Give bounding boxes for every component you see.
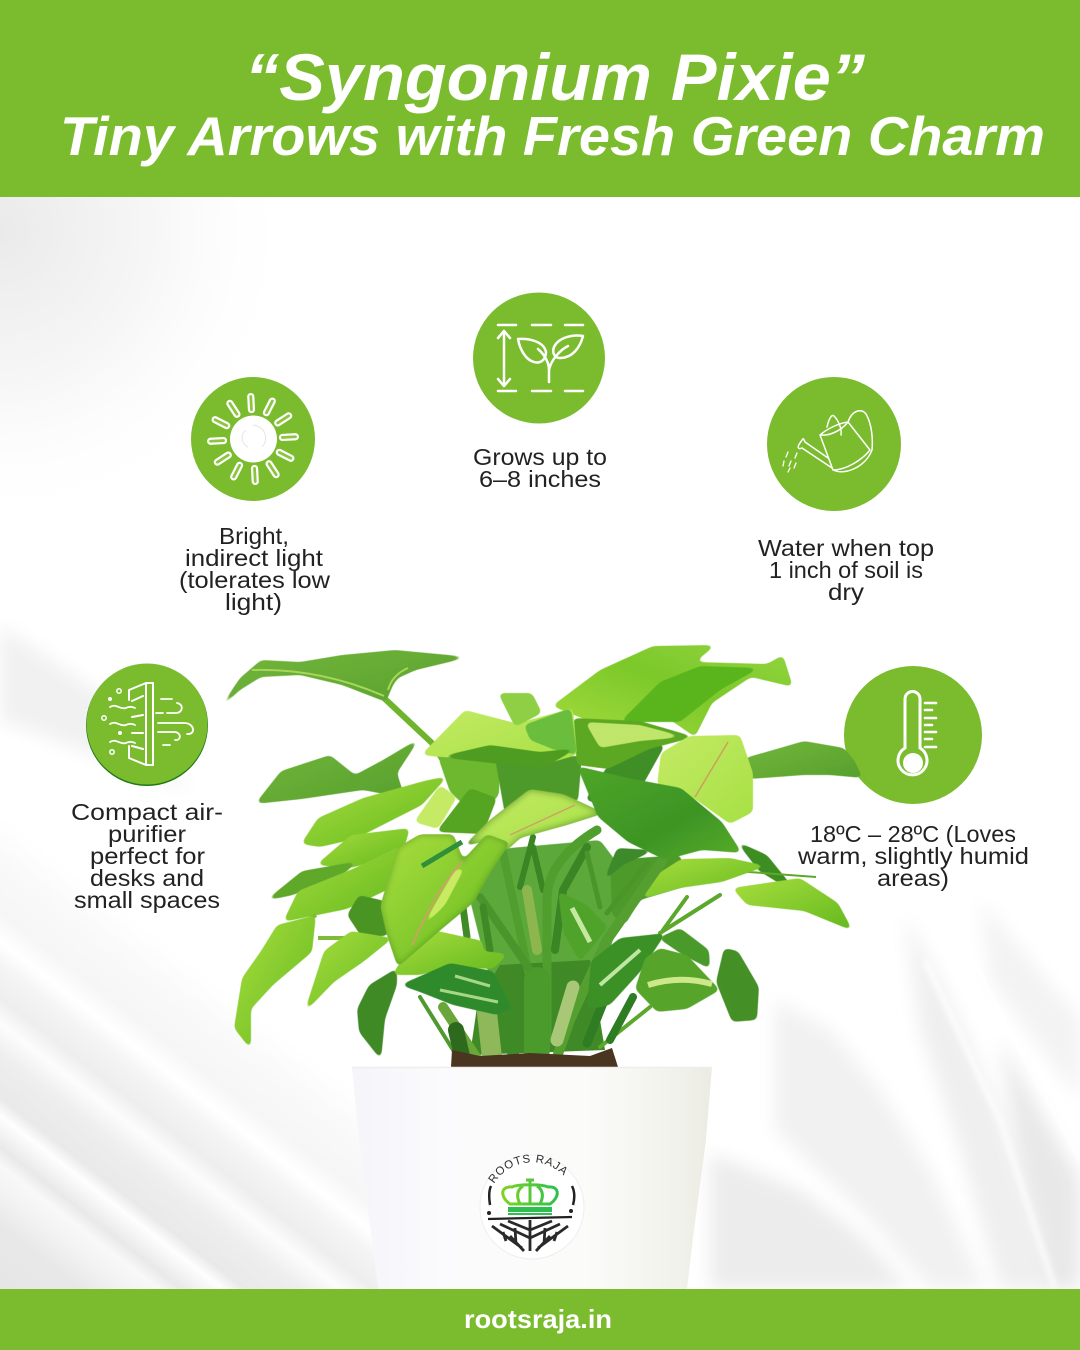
- leaves: left cluster: [414, 785, 457, 829]
- label: air purifier: desks and: [90, 865, 204, 891]
- label: temperature: [797, 821, 1029, 891]
- label: light: Bright,: [219, 523, 289, 549]
- title: “Syngonium Pixie”: [245, 40, 865, 114]
- label: air purifier: [71, 799, 223, 913]
- leaf: far right: [745, 741, 863, 779]
- plant: syngonium foliage: [216, 645, 863, 1067]
- icon: plant height: [473, 292, 605, 424]
- label: air purifier: small spaces: [74, 887, 220, 913]
- feature: light: [179, 377, 330, 615]
- leaf: variegated centre: [421, 708, 578, 767]
- label: air purifier: purifier: [108, 821, 186, 847]
- leaf: left middle: [255, 738, 420, 804]
- label: light: [179, 523, 330, 615]
- leaf: top left: [216, 650, 470, 713]
- label: temperature: areas): [877, 865, 949, 891]
- label: water: dry: [828, 579, 865, 605]
- label: light: indirect light: [185, 545, 324, 571]
- leaf: lower right spread: [732, 878, 853, 931]
- logo: Roots Raja badge: [480, 1154, 584, 1260]
- leaf: pale centre front: [466, 790, 602, 849]
- leaf: upper cluster dark: [573, 718, 695, 769]
- feature: height: [473, 292, 607, 492]
- label: water: 1 inch of soil is: [769, 557, 923, 583]
- website address: rootsraja.in: [464, 1304, 612, 1334]
- leaves: lower front: [558, 891, 608, 962]
- logo: Roots Raja badge: ROOTS RAJA: [488, 1154, 566, 1184]
- icon: sun: [191, 377, 315, 501]
- label: water: Water when top: [758, 535, 934, 561]
- feature: temperature: [797, 666, 1029, 891]
- subtitle: Tiny Arrows with Fresh Green Charm: [60, 105, 1045, 167]
- footer band: [0, 1289, 1080, 1350]
- label: water: [758, 535, 934, 605]
- leaves: back fill behind centre: [436, 740, 690, 1010]
- soil: [451, 1048, 618, 1067]
- label: air purifier: perfect for: [90, 843, 205, 869]
- label: air purifier: Compact air-: [71, 799, 223, 825]
- stems: petioles: [420, 830, 720, 1063]
- label: temperature: warm, slightly humid: [797, 843, 1029, 869]
- label: temperature: 18ºC – 28ºC (Loves: [810, 821, 1016, 847]
- header band: [0, 0, 1080, 197]
- leaf: top right large: [552, 645, 793, 737]
- feature: water: [758, 377, 934, 605]
- icon: air purifier: [86, 664, 208, 786]
- leaf: narrow right: [736, 841, 800, 896]
- label: height: [473, 444, 607, 492]
- feature: air purifier: [71, 664, 223, 913]
- label: height: Grows up to: [473, 444, 607, 470]
- label: light: (tolerates low: [179, 567, 330, 593]
- leaf: dark green large: [577, 766, 742, 860]
- icon: thermometer: [844, 666, 982, 804]
- leaf: large lower left: [381, 835, 509, 966]
- leaf: pale yellow green: [657, 735, 753, 824]
- pot: [352, 1066, 712, 1289]
- icon: watering can: [767, 377, 901, 511]
- label: light: light): [225, 589, 282, 615]
- label: height: 6–8 inches: [479, 466, 601, 492]
